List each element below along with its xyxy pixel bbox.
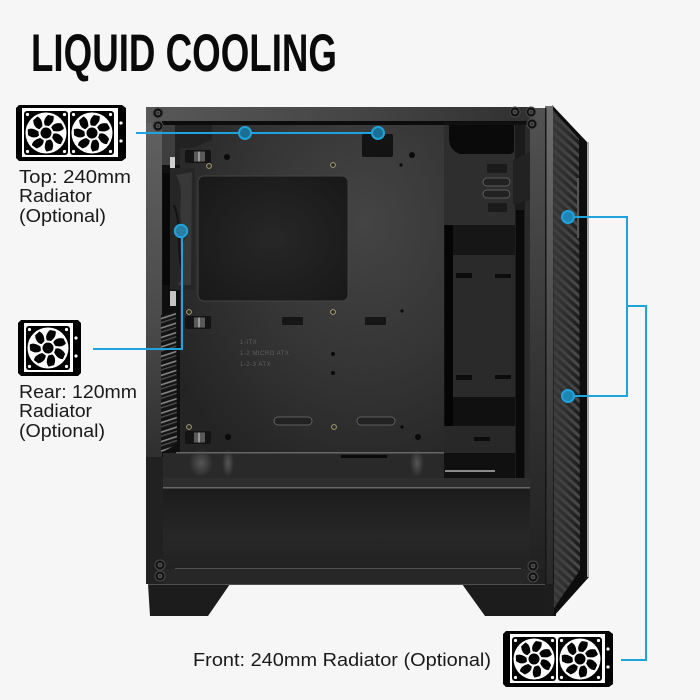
- tray marks lower lines: [240, 351, 289, 368]
- case screws: [153, 107, 538, 582]
- tray holes and standoffs: [187, 152, 421, 440]
- left interior cavity: [162, 122, 182, 457]
- label: front radiator: Front: 240mm Radiator (Optional): [193, 649, 491, 670]
- tray cutout: [198, 176, 348, 301]
- tray marks lower lines: 1-2-3 ATX: [240, 362, 271, 368]
- label: top radiator: Top: 240mm: [19, 166, 131, 187]
- tray motherboard marks: 1-ITX: [240, 340, 257, 346]
- rear vent slats: [161, 311, 177, 453]
- title: LIQUID COOLING: [31, 24, 337, 83]
- PC case photo: [146, 105, 589, 616]
- label: top radiator: Radiator: [19, 185, 92, 206]
- grommet slots: [274, 417, 395, 425]
- case feet: [148, 584, 556, 616]
- rear radiator connector: [93, 225, 187, 349]
- label: top radiator: (Optional): [19, 205, 106, 226]
- PSU shroud front: [146, 457, 545, 585]
- label: rear radiator: [19, 381, 137, 441]
- case front frame: [530, 106, 554, 616]
- drive bay area: [444, 122, 530, 482]
- label: rear radiator: Radiator: [19, 400, 92, 421]
- icon: rear 120mm radiator: [18, 320, 81, 376]
- rear fan: [163, 157, 195, 306]
- rear top slot: [362, 134, 393, 157]
- left frame strip: [146, 108, 163, 584]
- top radiator connector: [136, 127, 384, 139]
- PSU shroud top surface: [163, 449, 530, 488]
- label: top radiator: [19, 166, 131, 226]
- case side panel with diagonal mesh: [552, 105, 589, 616]
- motherboard tray: [162, 121, 530, 453]
- top frame bar: [146, 107, 530, 123]
- icon: front 240mm radiator: [503, 631, 613, 687]
- tray clips: [185, 150, 386, 444]
- icon: top 240mm radiator: [16, 105, 126, 161]
- label: rear radiator: Rear: 120mm: [19, 381, 137, 402]
- front radiator connector: [562, 211, 646, 660]
- label: rear radiator: (Optional): [19, 420, 105, 441]
- tray marks lower lines: 1-2 MICRO ATX: [240, 351, 289, 357]
